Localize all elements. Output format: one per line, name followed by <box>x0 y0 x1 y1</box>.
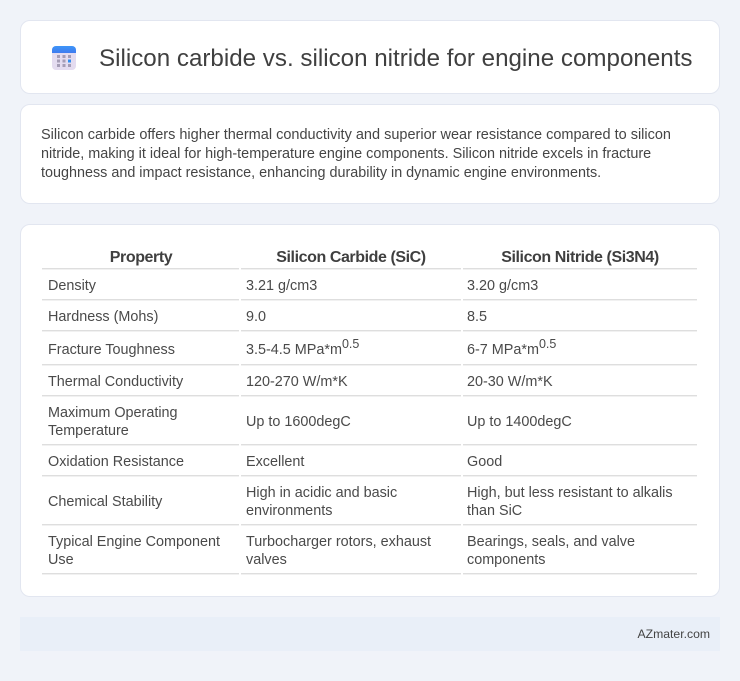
row: oxidation resistance: Oxidation Resistance <box>48 454 184 470</box>
row: typical engine component use: Turbocharger rotors, exhaust <box>246 534 431 550</box>
summary card <box>20 104 720 204</box>
row: chemical stability <box>48 485 673 519</box>
summary text: Silicon carbide offers higher thermal conductivity and superior wear resistance compared to silicon <box>41 127 671 143</box>
row: hardness <box>48 309 487 325</box>
row: fracture toughness: 6-7 MPa*m0.5 <box>467 337 556 358</box>
footer credit: AZmater.com <box>638 627 710 641</box>
row: density: 3.21 g/cm3 <box>246 278 317 294</box>
row: chemical stability: than SiC <box>467 503 522 519</box>
summary text: nitride, making it ideal for high-temperature engine components. Silicon nitride excels in fracture <box>41 146 651 162</box>
header row: Property <box>110 249 172 266</box>
row: thermal conductivity: Thermal Conductivity <box>48 374 183 390</box>
row: density: 3.20 g/cm3 <box>467 278 538 294</box>
row: hardness: 9.0 <box>246 309 266 325</box>
row: fracture toughness <box>48 337 556 358</box>
summary text: toughness and impact resistance, enhancing durability in dynamic engine environments. <box>41 165 601 181</box>
summary text <box>41 127 671 181</box>
row: thermal conductivity: 120-270 W/m*K <box>246 374 348 390</box>
row: maximum operating temperature: Temperature <box>48 423 129 439</box>
header row <box>110 249 659 266</box>
footer <box>20 617 720 651</box>
icon: calendar <box>52 46 76 70</box>
title: Silicon carbide vs. silicon nitride for engine components <box>99 45 692 72</box>
row: thermal conductivity: 20-30 W/m*K <box>467 374 553 390</box>
row: density <box>48 278 538 294</box>
row: chemical stability: Chemical Stability <box>48 494 162 510</box>
row: typical engine component use: Typical Engine Component <box>48 534 220 550</box>
row: maximum operating temperature: Up to 1600degC <box>246 414 351 430</box>
row: hardness: 8.5 <box>467 309 487 325</box>
row: oxidation resistance: Good <box>467 454 502 470</box>
row: maximum operating temperature: Maximum Operating <box>48 405 178 421</box>
row: oxidation resistance: Excellent <box>246 454 304 470</box>
row: typical engine component use <box>48 534 635 568</box>
row: typical engine component use: valves <box>246 552 287 568</box>
comparison table <box>42 249 697 575</box>
row: chemical stability: environments <box>246 503 332 519</box>
row: fracture toughness: 3.5-4.5 MPa*m0.5 <box>246 337 359 358</box>
row: oxidation resistance <box>48 454 502 470</box>
row: maximum operating temperature: Up to 1400degC <box>467 414 572 430</box>
row: hardness: Hardness (Mohs) <box>48 309 158 325</box>
header row: Silicon Carbide (SiC) <box>276 249 426 266</box>
row: typical engine component use: components <box>467 552 545 568</box>
row: fracture toughness: Fracture Toughness <box>48 342 175 358</box>
table card <box>20 224 720 597</box>
row: chemical stability: High in acidic and basic <box>246 485 397 501</box>
row: typical engine component use: Use <box>48 552 74 568</box>
row: typical engine component use: Bearings, seals, and valve <box>467 534 635 550</box>
title card <box>20 20 720 94</box>
row: maximum operating temperature <box>48 405 572 439</box>
header row: Silicon Nitride (Si3N4) <box>501 249 659 266</box>
row: thermal conductivity <box>48 374 553 390</box>
row: chemical stability: High, but less resistant to alkalis <box>467 485 673 501</box>
row: density: Density <box>48 278 96 294</box>
